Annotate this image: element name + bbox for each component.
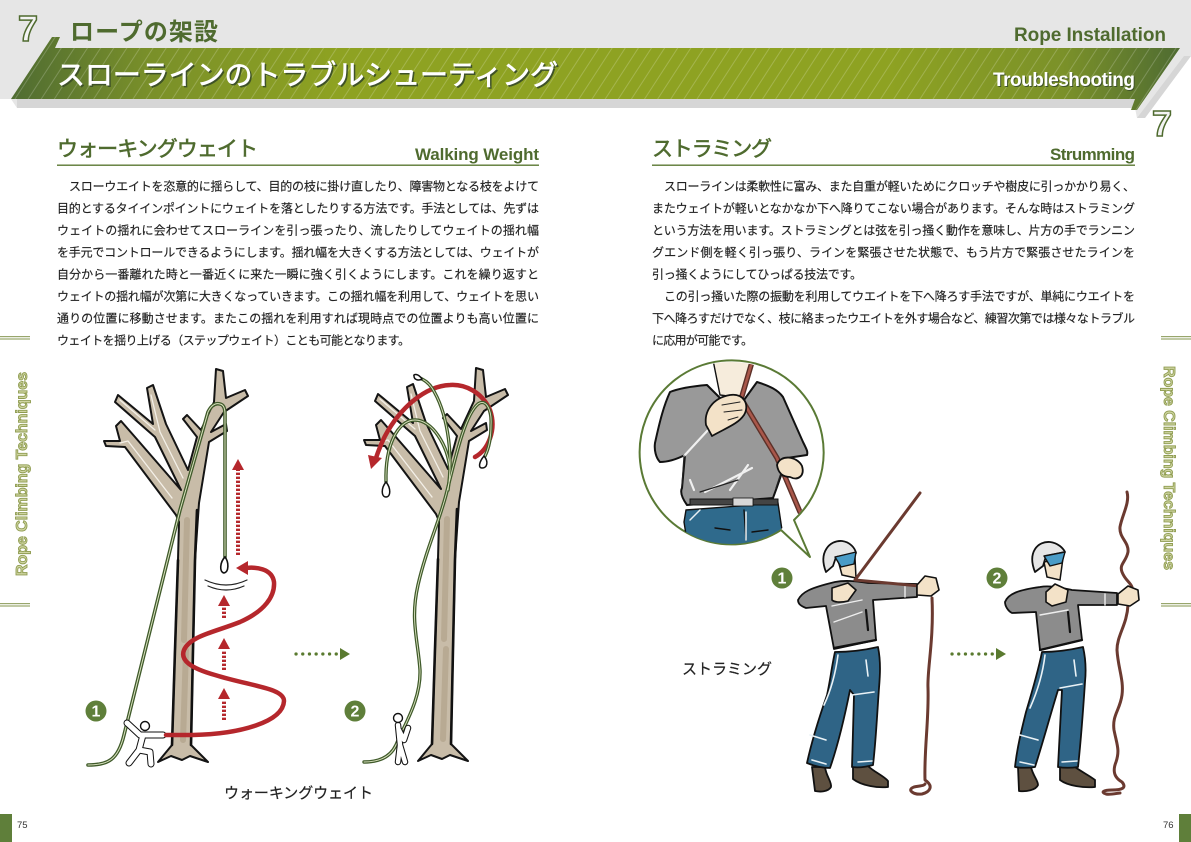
text block: strumming: 引っ掻くようにしてひっぱる技法です。 [652,268,862,282]
arrow: green dotted step [296,648,350,660]
heading: strumming: Strumming [1050,145,1135,164]
step badge 1: 1 [92,704,101,721]
step badge 1 [86,700,106,722]
chapter title: ロープの架設 [70,19,218,46]
man 1 sweater [798,581,917,649]
english chapter title: Rope Installation [1014,25,1166,46]
text block: strumming [652,178,1135,348]
arrow: green dotted step strumming [952,648,1006,660]
page number right [1163,814,1191,842]
arrow: red swing path [166,561,284,735]
man 1 sweater folds [832,585,905,622]
man 2 sweater [1005,586,1117,650]
text block: walking weight [57,178,539,348]
page title shadow and text: スローラインのトラブルシューティング [58,61,560,92]
person: thrower step 1 [127,722,163,764]
page title shadow and text: スローラインのトラブルシューティング [57,60,558,91]
illustration: man step 1 [798,493,939,794]
page number right: 76 [1163,820,1174,831]
text block: strumming: という方法を用います。ストラミングとは弦を引っ掻く動作を意味し、片方の手でランニン [652,222,1135,238]
chapter number right: 7 [1152,103,1172,144]
man 1 jeans [807,647,880,768]
caption: walking weight: ウォーキングウェイト [224,785,373,802]
swing motion lines [205,580,247,590]
text block: strumming: この引っ掻いた際の振動を利用してウエイトを下へ降ろす手法ですが、単純にウエイトを [664,288,1135,304]
text block: strumming: グエンド側を軽く引っ張り、ラインを緊張させた状態で、もう片方で緊張させたラインを [652,244,1135,260]
man 2 hands [1046,584,1139,606]
text block: strumming: またウェイトが軽いとなかなか下へ降りてこない場合があります。そんな時はストラミング [652,200,1135,216]
english page title: Troubleshooting [994,71,1136,92]
man 2 sweater folds [1040,594,1105,615]
text block: walking weight: 通りの位置に移動させます。またこの揺れを利用すれば現時点での位置よりも高い位置に [57,312,539,326]
man 1 belt [834,610,876,648]
person: thrower step 2 [394,714,408,762]
rope: swinging line step 2 [364,374,491,762]
illustration: tree step 2 [364,368,508,761]
arrows: red dotted rise [218,459,244,720]
man 1 jeans highlights [810,655,874,764]
man 1 hands [832,576,939,602]
man 2 boots [1018,767,1095,791]
text block: walking weight: ウェイトの揺れに会わせてスローラインを引っ張ったり、流したりしてウェイトの揺れ幅 [57,222,539,238]
text block: walking weight: ウェイトを揺り上げる（ステップウェイト）ことも可能となります。 [57,334,410,348]
step badge 2: 2 [351,704,360,721]
heading: walking weight [57,138,539,166]
text block: walking weight: を手元でコントロールできるようにします。揺れ幅を大きくする方法としては、ウェイトが [57,244,539,260]
heading: strumming [652,138,1135,166]
heading: walking weight: ウォーキングウェイト [57,138,258,161]
illustration: tree step 1 [104,369,248,762]
rope: throw line step 1 [88,404,228,765]
man 1 head [823,541,856,578]
step badge 2 strumming [986,568,1008,588]
text block: strumming: に応用が可能です。 [652,332,753,348]
caption: strumming: ストラミング [682,661,772,678]
header band [0,0,1191,118]
callout: hand detail circle [640,360,824,560]
step badge 2 strumming: 2 [993,571,1002,588]
step badge 1 strumming [772,568,792,588]
man 1 boots [812,766,888,792]
heading: strumming: ストラミング [652,138,772,161]
man 2 jeans [1015,647,1086,768]
man 2 rope [1103,492,1132,794]
text block: strumming: スローラインは柔軟性に富み、また自重が軽いためにクロッチや樹皮に引っかかり易く、 [664,178,1135,194]
english page title: Troubleshooting [993,70,1135,91]
step badge 1 strumming: 1 [778,571,787,588]
arrow: red arc over crown [368,385,492,469]
page number left: 75 [17,820,28,831]
step badge 2 [344,700,366,722]
chapter number left: 7 [18,8,38,49]
man 2 jeans highlights [1020,655,1082,765]
text block: strumming: 下へ降ろすだけでなく、枝に絡まったウエイトを外す場合など、練習次第では様々なトラブル [652,310,1135,326]
man 1 rope [855,493,932,794]
text block: walking weight: スローウエイトを恣意的に揺らして、目的の枝に掛け直したり、障害物となる枝をよけて [69,178,539,194]
page number left [0,814,28,842]
man 2 belt [1040,612,1082,650]
side label right: Rope Climbing Techniques [1160,366,1177,570]
text block: walking weight: 目的とするタイインポイントにウェイトを落としたりする方法です。手法としては、先ずは [57,200,539,216]
side label left: Rope Climbing Techniques [14,372,31,576]
man 2 head [1032,542,1065,580]
text block: walking weight: ウェイトの揺れ幅が次第に大きくなっていきます。この揺れ幅を利用して、ウェイトを思い [57,288,539,304]
illustration: man step 2 [1005,492,1139,794]
text block: walking weight: 自分から一番離れた時と一番近くに来た一瞬に強く引くようにします。これを繰り返すと [57,268,539,282]
heading: walking weight: Walking Weight [415,145,539,164]
